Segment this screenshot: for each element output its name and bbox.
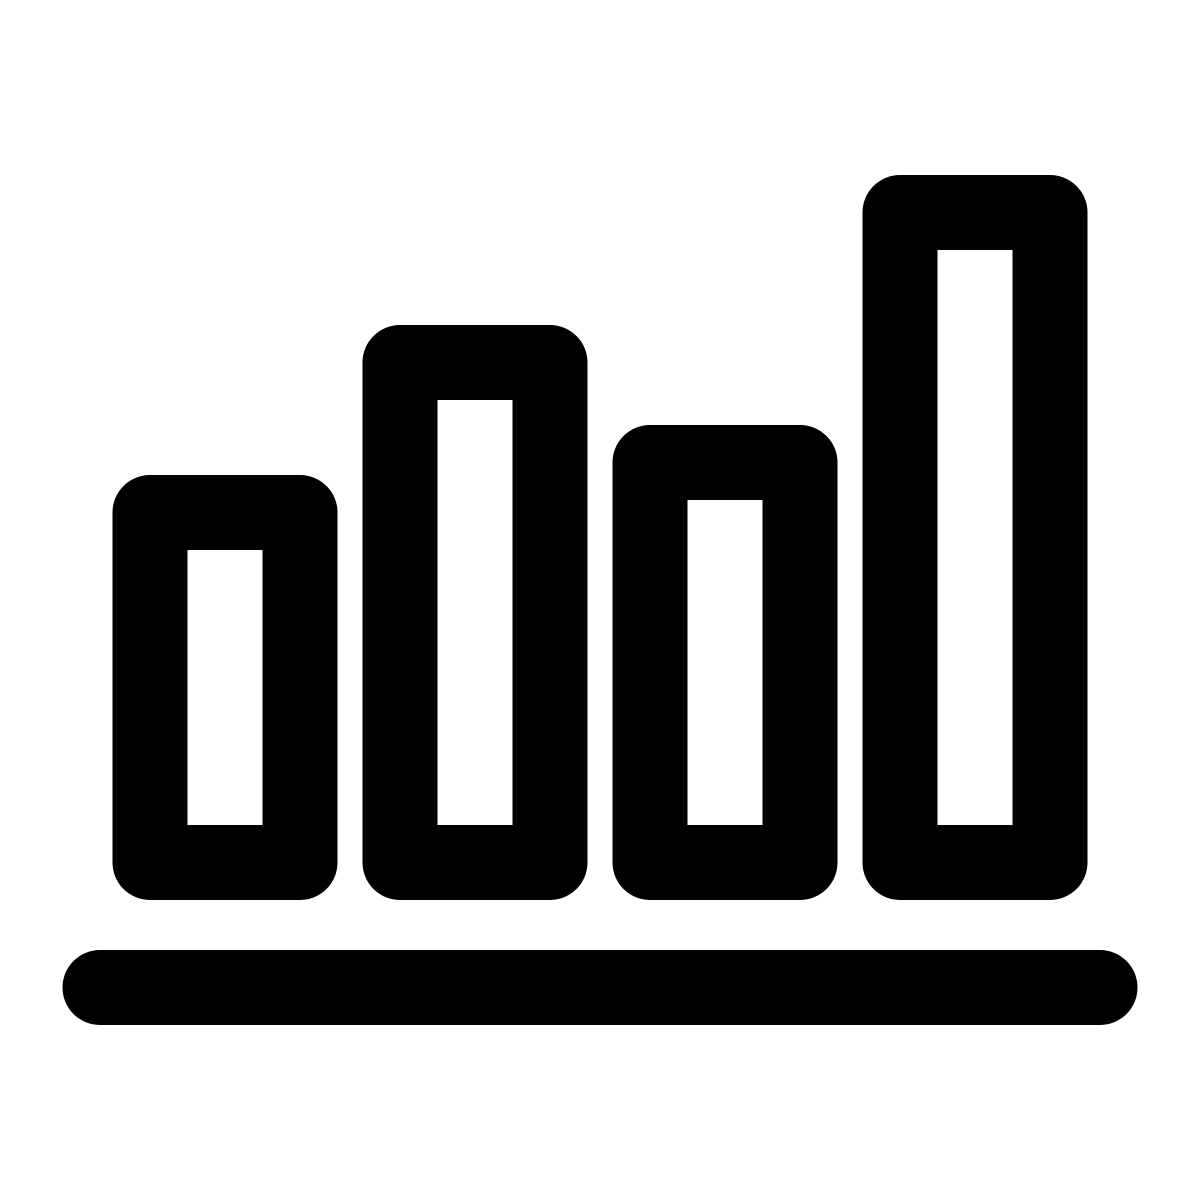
bar 4 <box>862 175 1088 900</box>
baseline <box>62 950 1138 1025</box>
bar 2 <box>362 325 588 900</box>
bar 1 <box>112 475 338 900</box>
bar 3 <box>612 425 838 900</box>
